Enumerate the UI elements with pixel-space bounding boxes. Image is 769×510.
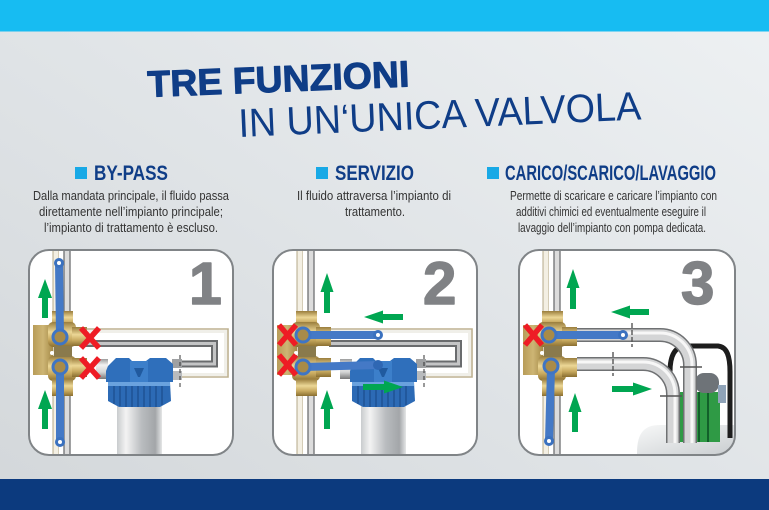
arrow: outlet up	[566, 269, 580, 309]
column 1 text: l’impianto di trattamento è escluso.	[44, 221, 218, 235]
arrow: inlet up	[320, 390, 334, 429]
column 3 text	[510, 189, 717, 235]
red cross: closed port	[525, 325, 542, 345]
column 1 text: Dalla mandata principale, il fluido passa	[33, 189, 229, 203]
arrow: inlet up	[568, 393, 582, 432]
upper chrome pipe	[577, 323, 702, 443]
top band	[0, 0, 769, 32]
pump motor	[680, 373, 726, 442]
pump tank	[637, 425, 735, 455]
bottom band	[0, 479, 769, 510]
title: IN UN‘UNICA VALVOLA	[237, 84, 642, 146]
arrow: return left	[364, 310, 403, 324]
arrow: flow right through filter	[363, 380, 403, 394]
column 2 heading: servizio: SERVIZIO	[335, 162, 414, 185]
handle: lower valve, horizontal	[296, 360, 383, 374]
column 1 text: direttamente nell’impianto principale;	[39, 205, 223, 219]
panel 2: servizio diagram	[273, 250, 477, 455]
column 1 heading: by-pass: BY-PASS	[94, 162, 168, 185]
column 3 text: additivi chimici ed eventualmente eseguire il	[516, 205, 706, 219]
panel 1: by-pass diagram	[29, 250, 233, 455]
column 2 text: Il fluido attraversa l’impianto di	[297, 189, 451, 203]
number 1: 1	[189, 251, 222, 317]
handle: upper valve, vertical	[53, 258, 67, 344]
column 2 text: trattamento.	[345, 205, 405, 219]
panel border	[29, 250, 233, 455]
arrow: return left	[611, 306, 649, 318]
red cross: lower branch closed	[81, 358, 99, 378]
column 1 text	[33, 189, 229, 235]
panel border	[519, 250, 735, 455]
handle: upper valve, horizontal	[296, 328, 383, 342]
handle: upper valve, horizontal	[542, 328, 628, 342]
column 2 heading: servizio	[316, 162, 414, 185]
column 3 text: lavaggio dell’impianto con pompa dedicata.	[518, 221, 706, 235]
column 3 text: Permette di scaricare e caricare l’impianto con	[510, 189, 717, 203]
arrow: inlet up	[38, 390, 52, 429]
column 2 text	[297, 189, 451, 219]
handle: lower valve, vertical	[53, 360, 67, 447]
panel 3: carico scarico lavaggio diagram	[519, 250, 735, 455]
number 2: 2	[423, 250, 456, 317]
panel border	[273, 250, 477, 455]
column 1 heading: by-pass	[75, 162, 168, 185]
handle: lower valve, pointing down	[544, 359, 558, 446]
arrow: flow right to pump	[612, 382, 652, 396]
title: TRE FUNZIONI	[147, 54, 410, 105]
lower chrome pipe	[577, 352, 682, 443]
pump carrying handle	[670, 346, 730, 438]
number 3: 3	[681, 250, 714, 317]
arrow: outlet up	[38, 279, 52, 318]
red cross: upper closed	[279, 325, 296, 345]
title	[147, 54, 642, 146]
red cross: upper branch closed	[81, 328, 99, 348]
arrow: outlet up	[320, 273, 334, 313]
red cross: lower closed	[279, 355, 296, 375]
